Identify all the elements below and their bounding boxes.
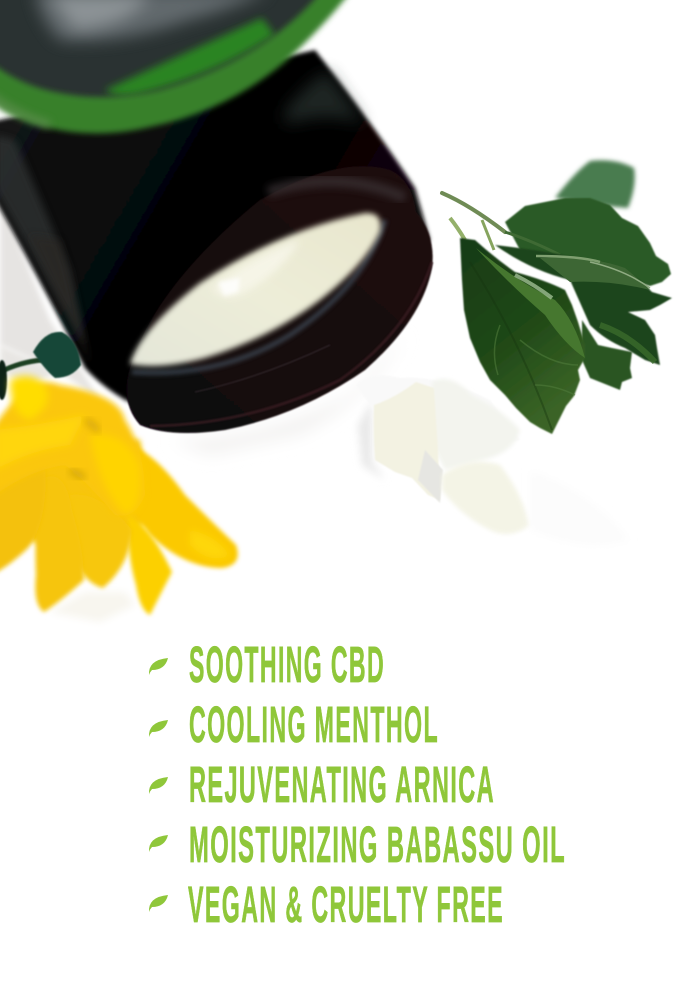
icon: leaf bullet <box>149 895 168 912</box>
jar body <box>0 50 430 430</box>
table shadows <box>0 200 405 622</box>
balm pieces <box>356 375 630 546</box>
front leaf <box>460 238 585 434</box>
jar rim <box>126 166 433 433</box>
middle leaves <box>495 245 672 365</box>
icon: leaf bullet <box>149 777 168 794</box>
upper leaf <box>505 198 671 286</box>
item: soothing CBD <box>149 636 385 693</box>
ingredient list <box>149 636 566 933</box>
mint sprig <box>442 160 672 434</box>
item: vegan and cruelty free <box>149 876 504 933</box>
item: rejuvenating arnica <box>149 756 495 813</box>
icon: leaf bullet <box>149 720 168 737</box>
icon: leaf bullet <box>149 835 168 852</box>
yellow flower <box>0 376 238 615</box>
back leaf <box>555 160 635 208</box>
balm surface in jar <box>130 213 381 366</box>
icon: leaf bullet <box>149 658 168 675</box>
flower stem and bud <box>0 332 81 400</box>
stems <box>442 193 505 232</box>
item: cooling menthol <box>149 696 439 753</box>
lower small leaf <box>582 320 632 390</box>
green cap <box>0 0 352 134</box>
photo: product still life <box>0 0 672 622</box>
item: moisturizing babassu oil <box>149 816 566 873</box>
ingredient list: SOOTHING CBD <box>189 636 385 693</box>
